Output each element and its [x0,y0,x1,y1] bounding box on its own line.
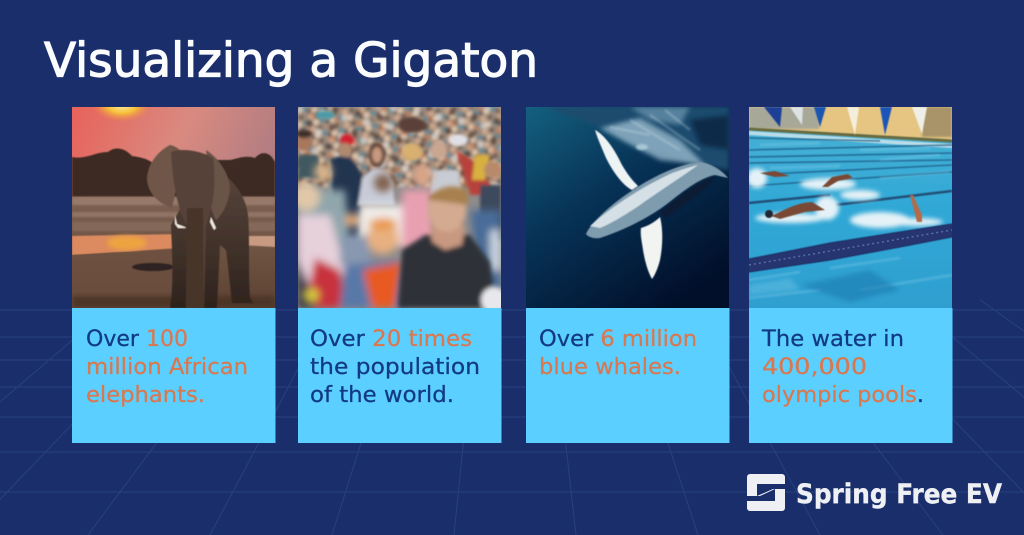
caption box [298,308,502,443]
whale [586,130,728,279]
caption text: million African [86,355,248,380]
splashes [747,168,943,228]
caption text [86,327,248,408]
photo: blurred crowd [292,107,507,313]
pennant flags [764,107,927,135]
photo: elephant at sunset [72,86,275,308]
background cover above the grid [0,0,1024,300]
panel: blue whales [526,107,730,443]
elephant [147,145,253,308]
lane rope [749,224,952,272]
logo: Spring Free EV [747,474,1002,511]
panel: olympic pools [747,107,952,443]
caption text: Over 6 million [539,327,697,352]
caption text: 400,000 [762,355,867,380]
caption text [310,327,480,408]
photo: swimmers in pool [747,107,952,308]
caption box [526,308,730,443]
caption text: elephants. [86,383,205,408]
caption text: of the world. [310,383,454,408]
caption text: Over 100 [86,327,188,352]
caption box [72,308,276,443]
caption text: blue whales. [539,355,681,380]
caption text: Over 20 times [310,327,472,352]
title: Visualizing a Gigaton [44,34,538,88]
photo: whale underwater [526,107,729,308]
caption text: The water in [761,327,904,352]
caption text: the population [310,355,480,380]
caption text [761,327,924,408]
panel: population [292,107,507,443]
caption box [749,308,952,443]
water ripples [749,143,952,298]
lane lines [749,138,952,208]
caption text [539,327,697,380]
icon: logo mark [747,474,785,511]
logo wordmark: Spring Free EV [796,479,1002,510]
caption text: olympic pools. [762,383,924,408]
swimmers [760,171,922,222]
panel: elephants [72,86,276,443]
